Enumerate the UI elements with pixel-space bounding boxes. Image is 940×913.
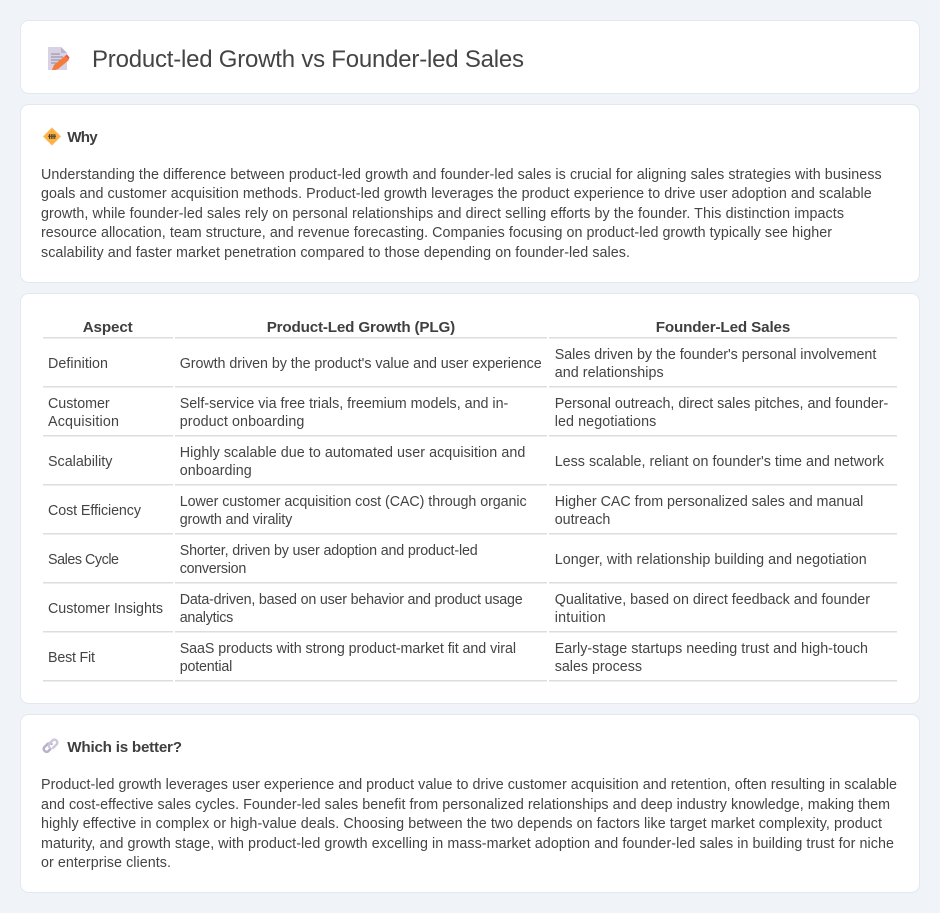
row: customer insights: Data-driven, based on user behavior and product usage (180, 592, 523, 608)
text block: why explanation: resource allocation, team structure, and revenue forecasting. Companies focusing on product-led growth typically see higher (41, 225, 832, 241)
row: best fit: Best Fit (48, 650, 95, 666)
row: customer insights: intuition (555, 610, 606, 626)
panel: comparison table (20, 294, 920, 704)
text block: why explanation: scalability and faster market penetration compared to those depending on founder-led sales. (41, 245, 630, 261)
row: cost efficiency: Cost Efficiency (48, 503, 142, 519)
table header row: Product-Led Growth (PLG) (267, 319, 455, 336)
row: customer acquisition: Personal outreach, direct sales pitches, and founder- (555, 396, 889, 412)
row: customer acquisition: Acquisition (48, 414, 119, 430)
row: cost efficiency (43, 494, 897, 534)
text block: verdict: Product-led growth leverages user experience and product value to drive customer acquisition and retention, often resulting in scalable (41, 777, 897, 793)
row: scalability (43, 445, 897, 486)
row: customer insights: Qualitative, based on direct feedback and founder (555, 592, 870, 608)
row: best fit (43, 641, 897, 682)
row: definition: Sales driven by the founder's personal involvement (555, 347, 876, 363)
row: definition: and relationships (555, 365, 664, 381)
row: sales cycle: Shorter, driven by user adoption and product-led (180, 543, 478, 559)
panel: title header (20, 20, 920, 94)
row: best fit: SaaS products with strong product-market fit and viral (180, 641, 516, 657)
row: definition: Definition (48, 356, 108, 372)
row: scalability: onboarding (180, 463, 252, 479)
icon: chain link (44, 740, 57, 752)
icon: memo with pencil (48, 47, 70, 70)
row: customer insights: analytics (180, 610, 233, 626)
text block: why explanation (41, 167, 882, 261)
row: sales cycle (43, 543, 897, 584)
text block: why explanation: Understanding the difference between product-led growth and founder-led sales is crucial for aligning sales strategies with business (41, 167, 882, 183)
row: best fit: potential (180, 659, 232, 675)
row: best fit: sales process (555, 659, 642, 675)
icon: orange diamond sign (44, 128, 60, 145)
row: sales cycle: conversion (180, 561, 246, 577)
row: customer acquisition: product onboarding (180, 414, 304, 430)
text block: verdict: or enterprise clients. (41, 855, 171, 871)
table header row: Founder-Led Sales (656, 319, 790, 336)
row: scalability: Scalability (48, 454, 113, 470)
row: customer acquisition: Customer (48, 396, 110, 412)
text block: verdict: highly effective in complex or high-value deals. Choosing between the two depends on factors like target market complexity, product (41, 816, 882, 832)
heading: why: Why (67, 129, 98, 146)
row: customer acquisition: led negotiations (555, 414, 656, 430)
row: scalability: Less scalable, reliant on founder's time and network (555, 454, 885, 470)
row: sales cycle: Sales Cycle (48, 552, 119, 568)
row: customer acquisition: Self-service via free trials, freemium models, and in- (180, 396, 509, 412)
row: definition: Growth driven by the product's value and user experience (180, 356, 542, 372)
row: definition (43, 347, 897, 388)
row: customer insights: Customer Insights (48, 601, 163, 617)
table header row (43, 319, 897, 338)
row: sales cycle: Longer, with relationship building and negotiation (555, 552, 867, 568)
row: customer insights (43, 592, 897, 632)
row: cost efficiency: growth and virality (180, 512, 293, 528)
row: cost efficiency: Lower customer acquisition cost (CAC) through organic (180, 494, 527, 510)
heading: which is better: Which is better? (67, 739, 182, 756)
row: best fit: Early-stage startups needing trust and high-touch (555, 641, 868, 657)
row: cost efficiency: Higher CAC from personalized sales and manual (555, 494, 863, 510)
text block: verdict: and cost-effective sales cycles. Founder-led sales benefit from personalized relationships and deep industry knowledge, making them (41, 797, 890, 813)
panel: which is better (20, 714, 920, 892)
row: scalability: Highly scalable due to automated user acquisition and (180, 445, 525, 461)
title: Product-led Growth vs Founder-led Sales (92, 46, 524, 73)
row: cost efficiency: outreach (555, 512, 610, 528)
text block: why explanation: growth, while founder-led sales rely on personal relationships and direct selling efforts by the founder. This distinction impacts (41, 206, 844, 222)
text block: verdict: maturity, and growth stage, with product-led growth excelling in mass-market adoption and founder-led sales in building trust for niche (41, 836, 894, 852)
row: customer acquisition (43, 396, 897, 436)
table header row: Aspect (83, 319, 133, 336)
panel: why (20, 104, 920, 282)
text block: verdict (41, 777, 897, 871)
text block: why explanation: goals and customer acquisition methods. Product-led growth leverages the product experience to drive user adoption and scalable (41, 186, 872, 202)
